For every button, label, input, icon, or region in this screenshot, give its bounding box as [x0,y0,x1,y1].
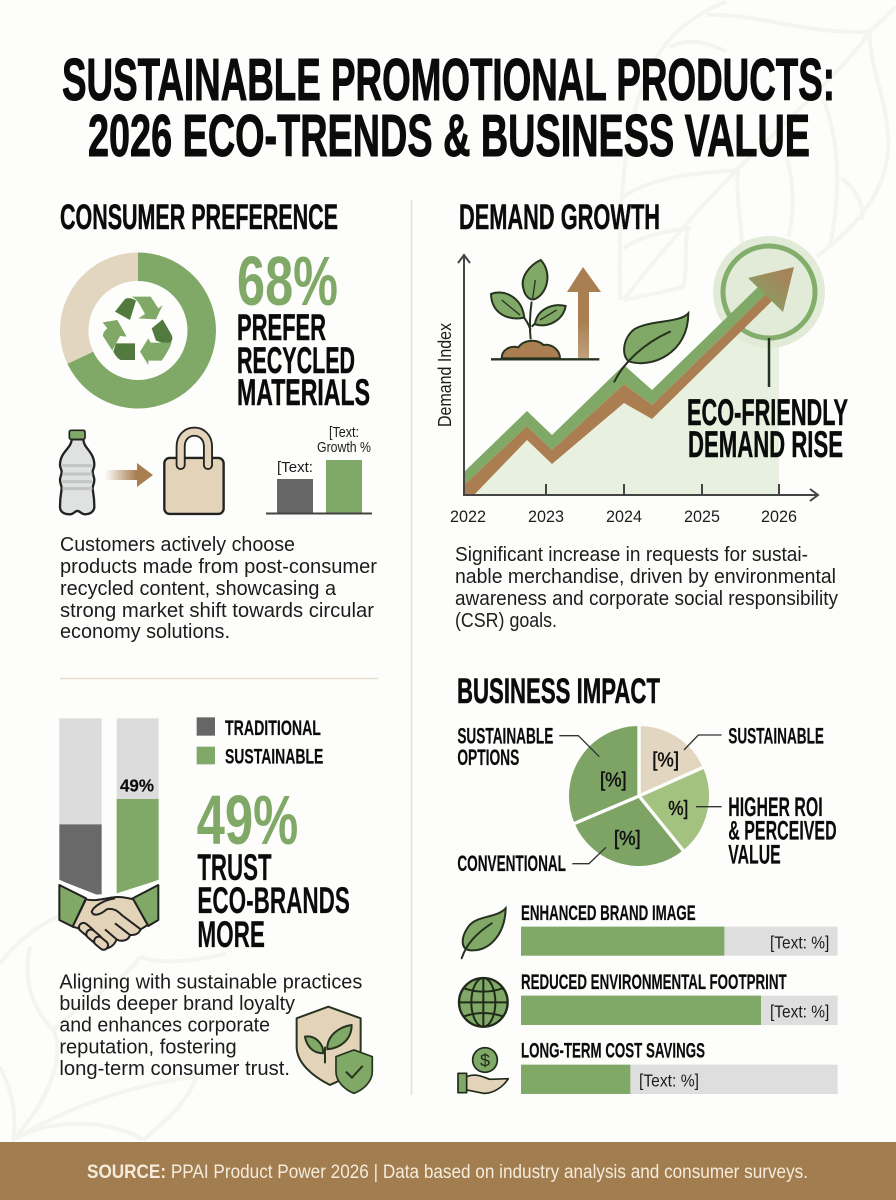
icon: leaf [462,908,506,958]
chart: demand line [435,236,848,526]
mini bar chart: growth [266,424,372,514]
icon: handshake [59,882,158,952]
background leaves: top right [620,2,896,300]
stacked bars: 49% [120,776,154,796]
stat: 68% prefer recycled materials [237,242,370,413]
icon: plastic bottle [60,430,94,514]
icon: sprout [491,260,599,359]
pie labels: SUSTAINABLE [728,723,824,748]
text block: trust: long-term consumer trust. [59,1058,290,1080]
stat: 49% trust eco-brands more: MORE [197,914,265,955]
stat: 49% trust eco-brands more: ECO-BRANDS [197,880,350,921]
stat: 68% prefer recycled materials: RECYCLED [237,340,355,381]
bar: enhanced brand image: ENHANCED BRAND IMAGE [521,902,696,925]
pie labels: CONVENTIONAL [457,851,566,876]
text block: trust: and enhances corporate [59,1015,270,1037]
heading: business impact: BUSINESS IMPACT [457,672,660,711]
pie chart [559,724,722,868]
arrow: growth up [567,267,601,358]
bar: long-term cost savings: [Text: %] [639,1071,699,1091]
icon: recycle [103,297,172,365]
chart area fill [474,295,779,495]
panel: consumer preference [60,198,377,643]
text block: consumer preference: products made from post-consumer [60,556,377,578]
text block: demand growth: nable merchandise, driven by environmental [455,566,836,588]
stat: 68% prefer recycled materials: 68% [237,242,338,320]
heading: demand growth: DEMAND GROWTH [459,198,660,237]
callout: eco-friendly demand rise [687,338,848,465]
heading: consumer preference: CONSUMER PREFERENCE [60,198,338,237]
axis labels: 2022 [450,507,486,526]
icon: shield with sprout [297,1007,372,1093]
text block: consumer preference: Customers actively choose [60,534,295,556]
pie chart: [%] [614,827,641,850]
icon: hand with coin: $ [480,1051,490,1071]
icon: leaf on trend [614,313,688,382]
pie labels: SUSTAINABLE [457,723,553,748]
mini bar chart: growth: Growth % [317,439,371,456]
text block: consumer preference: recycled content, showcasing a [60,578,337,600]
axis labels: 2023 [528,507,564,526]
pie labels: VALUE [728,839,781,869]
text block: consumer preference: economy solutions. [60,621,230,643]
text block: consumer preference [60,534,377,643]
panel: business impact [457,672,838,1094]
background leaves: bottom left [0,910,227,1140]
text block: consumer preference: strong market shift towards circular [60,600,374,622]
text block: trust: builds deeper brand loyalty [59,993,295,1015]
icon: tote bag [164,432,224,514]
stat: 68% prefer recycled materials: PREFER [237,307,326,348]
source text: SOURCE: PPAI Product Power 2026 | Data based on industry analysis and consumer surveys. [87,1162,808,1183]
legend: SUSTAINABLE [225,745,323,768]
text block: demand growth: Significant increase in requests for sustai- [455,544,808,566]
icon: hand with coin [458,1048,508,1093]
bar: reduced environmental footprint [521,971,838,1025]
bar: enhanced brand image: [Text: %] [770,932,829,952]
pie labels [457,723,837,876]
panel: trust [59,717,372,1093]
pie chart: %] [668,797,688,820]
icon: globe [459,978,508,1027]
bar: enhanced brand image [521,902,838,956]
y axis title: Demand Index [435,323,455,427]
bar: long-term cost savings: LONG-TERM COST SAVINGS [521,1040,705,1063]
pie chart: [%] [652,749,679,772]
footer bar [0,1142,896,1200]
trend band [464,267,794,495]
pie labels: HIGHER ROI [728,792,823,822]
text block: demand growth: (CSR) goals. [455,610,557,632]
highlight circle [713,236,825,348]
stat: 49% trust eco-brands more: TRUST [197,847,272,888]
bar: long-term cost savings [521,1040,838,1094]
pie labels: OPTIONS [457,745,519,770]
text block: trust: Aligning with sustainable practices [59,971,362,993]
text block: demand growth [455,544,838,632]
donut chart: 68% [60,252,216,408]
axes [458,255,818,501]
mini bar chart: growth: [Text: [277,459,313,476]
text block: trust [59,971,362,1080]
axis labels [450,507,797,526]
bar: reduced environmental footprint: [Text: %] [770,1001,829,1021]
pie chart: [%] [600,769,627,792]
stat: 68% prefer recycled materials: MATERIALS [237,372,370,413]
arrow: bottle to bag [105,463,153,487]
axis labels: 2024 [606,507,642,526]
stat: 49% trust eco-brands more [197,781,350,955]
axis labels: 2025 [684,507,720,526]
legend: TRADITIONAL [225,717,321,740]
text block: demand growth: awareness and corporate social responsibility [455,588,838,610]
text block: trust: reputation, fostering [59,1036,237,1058]
stat: 49% trust eco-brands more: 49% [197,781,298,859]
stacked bars [59,718,159,897]
mini bar chart: growth: [Text: [329,424,359,441]
title [62,47,835,169]
panel: demand growth [435,198,848,632]
axis labels: 2026 [761,507,797,526]
legend [197,717,323,768]
